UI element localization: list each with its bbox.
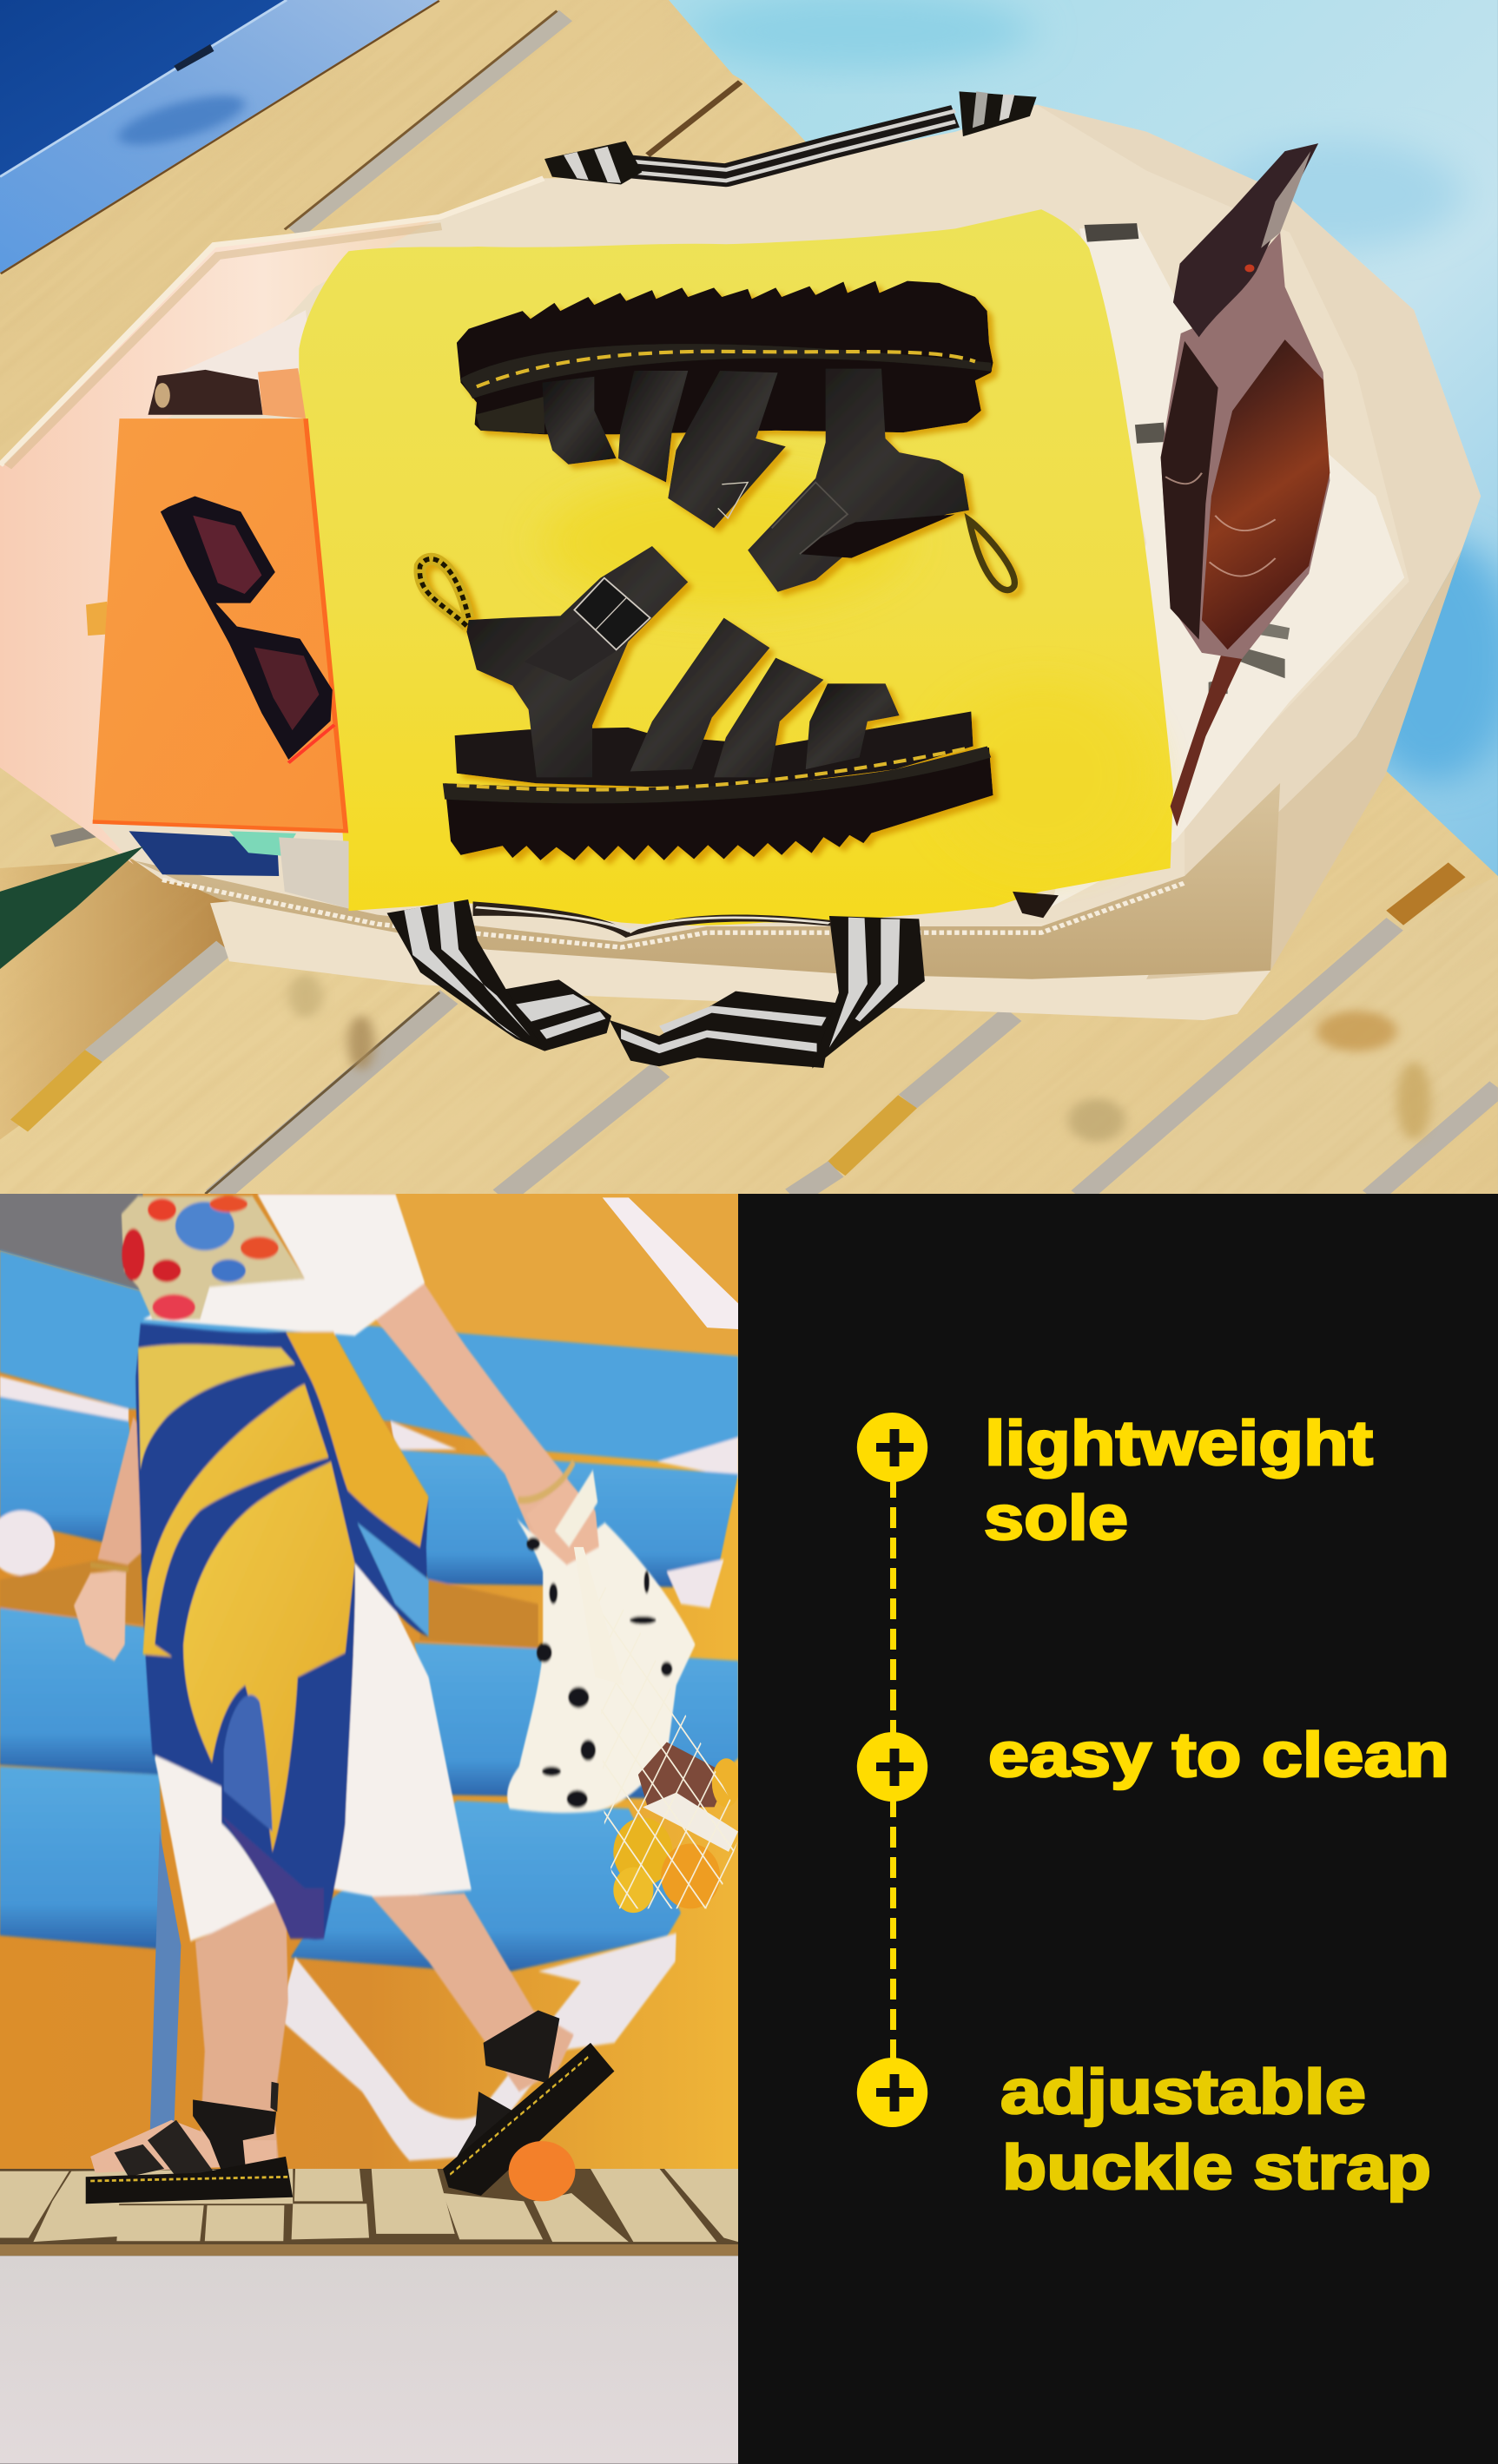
bag lower cream base <box>210 853 1270 1020</box>
outsole with zigzag tread <box>457 281 993 434</box>
strap 1 <box>543 377 617 464</box>
bag front band <box>134 783 1280 979</box>
bag interior <box>0 105 1481 947</box>
wing <box>1202 339 1330 649</box>
head and beak <box>1173 143 1318 337</box>
white folded cloth <box>1051 223 1404 907</box>
bag right side panel <box>1037 105 1481 938</box>
heel strap <box>748 369 969 592</box>
pull tab <box>419 559 469 626</box>
sarong yellow shapes <box>138 1344 295 1470</box>
panel: top photo of sandals in a tote bag <box>0 0 1498 1194</box>
label: adjustable buckle strap <box>1000 2058 1431 2203</box>
plus icon 3 <box>857 2058 927 2127</box>
left leg <box>195 1896 288 2161</box>
center wave piece <box>610 992 836 1068</box>
label: lightweight sole <box>984 1409 1373 1553</box>
orange ball <box>509 2141 575 2201</box>
panel: bottom photo of walking model <box>0 1194 738 2464</box>
leaf <box>0 847 143 969</box>
sarong base <box>135 1323 429 1940</box>
white lounger frame <box>279 1933 676 2161</box>
bag rim left panel <box>0 217 439 865</box>
hand and handle <box>526 1482 599 1565</box>
wooden bird figure <box>1161 143 1330 827</box>
model sandals and ball <box>86 2010 614 2204</box>
folded piece <box>502 979 611 1051</box>
blue lounger pole <box>150 1831 181 2132</box>
net bag with fruit <box>574 1547 741 1913</box>
tote bag body <box>0 105 1481 1020</box>
plus icon 2 <box>857 1732 927 1802</box>
left arm <box>97 1417 143 1565</box>
left sandal <box>193 2099 276 2177</box>
footbed <box>476 397 544 433</box>
right sandal <box>484 2010 559 2084</box>
floral top <box>122 1196 305 1320</box>
pull loop <box>969 520 1014 590</box>
front handle with black and white stripes <box>387 899 925 1069</box>
welt <box>460 344 992 399</box>
top sandal, upside down <box>457 281 1014 592</box>
label: adjustable buckle strap: adjustable <box>1000 2058 1366 2127</box>
blue box corner <box>0 0 449 279</box>
bottle cap <box>148 370 263 415</box>
strap A <box>630 618 769 771</box>
floor <box>0 2256 738 2464</box>
right leg <box>372 1894 574 2092</box>
sunglasses <box>161 496 334 763</box>
left strap <box>387 899 544 1051</box>
navy cap <box>129 831 279 876</box>
welt <box>443 747 991 803</box>
label: adjustable buckle strap: buckle strap <box>1002 2133 1431 2203</box>
left foot <box>90 2120 276 2173</box>
label: easy to clean: easy to clean <box>988 1721 1449 1790</box>
panel: black feature list <box>856 1409 1449 2204</box>
white skirt <box>155 1523 472 1941</box>
label: lightweight sole: lightweight <box>985 1409 1373 1479</box>
label: lightweight sole: sole <box>984 1484 1128 1553</box>
orange and grey backdrop <box>0 1189 738 2173</box>
body <box>1161 233 1330 659</box>
strap C <box>806 683 900 769</box>
outsole with zigzag tread <box>445 748 993 860</box>
wood knots <box>288 974 1431 1142</box>
strap 3 <box>668 371 786 528</box>
tail <box>1171 649 1242 827</box>
strap 2 <box>618 371 688 483</box>
thin top ribbon <box>473 901 831 938</box>
right strap <box>812 916 925 1069</box>
yellow towel <box>299 209 1173 926</box>
dashed connector line <box>890 1476 896 2062</box>
orange notebook, bottle and fabric items <box>0 368 349 969</box>
back handle <box>544 91 1037 185</box>
strap B <box>714 658 823 777</box>
white shirt <box>143 1194 425 1336</box>
polka dot bag <box>507 1470 696 1813</box>
model figure <box>74 1194 597 2161</box>
notebook <box>93 418 346 831</box>
midsole <box>455 712 973 789</box>
bottom sandal <box>419 546 993 860</box>
deck gaps <box>19 11 1498 1197</box>
buckle <box>574 578 650 649</box>
plus icon 1 <box>857 1413 927 1482</box>
wooden platform <box>0 2169 738 2256</box>
blue sun lounger bands <box>0 1250 738 1973</box>
right arm <box>353 1283 597 1552</box>
wooden deck <box>0 0 1498 1194</box>
sky-blue backdrop <box>573 0 1498 1194</box>
heel and buckle strap <box>466 546 688 777</box>
